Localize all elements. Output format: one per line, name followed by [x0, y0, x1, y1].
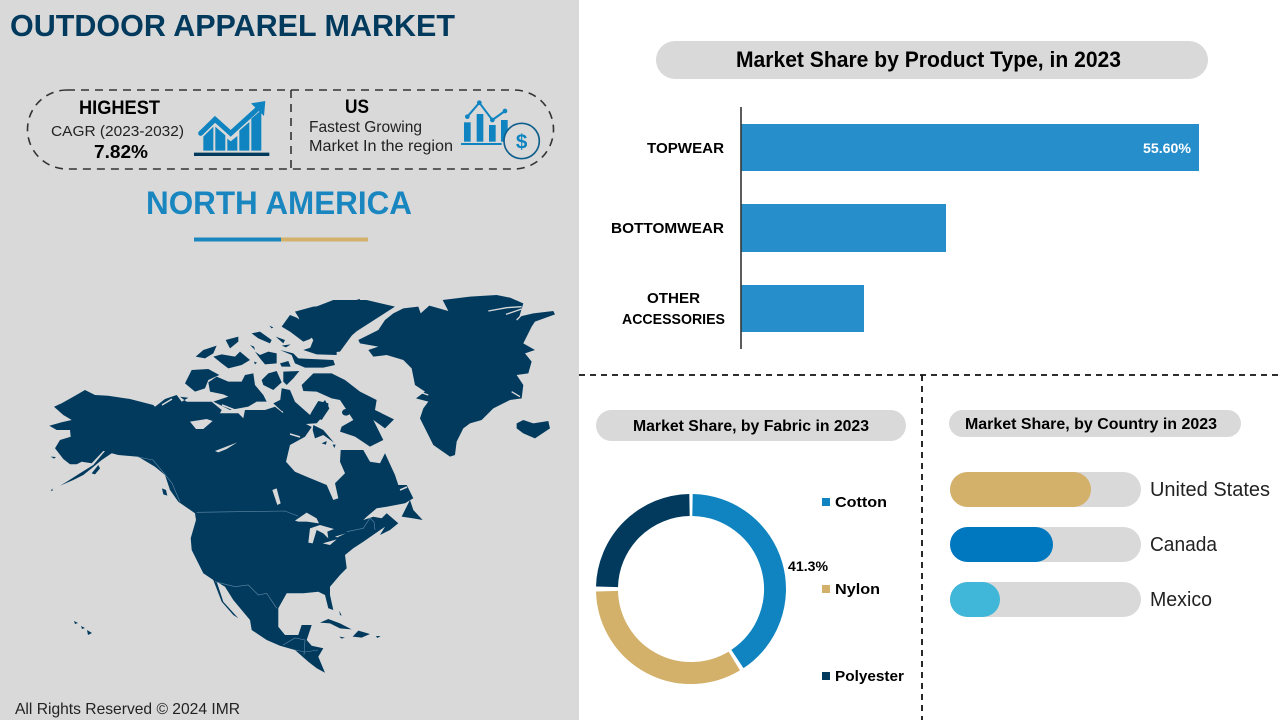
text: fastest growing US [309, 97, 453, 155]
bar labels [611, 140, 725, 328]
map: Great Lakes [272, 488, 346, 545]
map: North America [49, 295, 555, 673]
text: highest CAGR: HIGHEST [79, 98, 160, 119]
map: Foxe Basin island [342, 409, 350, 416]
map: Greenland [358, 295, 555, 457]
map: Arctic Archipelago [185, 299, 360, 411]
text: highest CAGR: 7.82% [94, 141, 148, 162]
map: coastal streaks [162, 399, 407, 511]
legend: Nylon [835, 581, 880, 598]
heading pill [656, 41, 1208, 79]
map: Melville Peninsula islet [313, 400, 329, 420]
progress bar: Canada: Canada [1150, 534, 1218, 556]
icon: growth chart [194, 101, 269, 154]
map: Hawaii [74, 621, 92, 635]
bar chart [611, 107, 1199, 349]
bar labels: OTHER [647, 290, 700, 307]
map: Greenland fjords [418, 307, 523, 397]
map: mainland [49, 388, 413, 673]
legend [822, 494, 904, 685]
icon: chart with dollar coin [461, 100, 539, 159]
text: fastest growing US: US [345, 97, 369, 118]
text: fastest growing US: Market In the region [309, 138, 453, 155]
panel: market share by product type [611, 41, 1208, 349]
map: country borders [138, 457, 375, 655]
bar labels: TOPWEAR [647, 140, 724, 157]
legend: Cotton [835, 494, 887, 511]
text: highest CAGR [51, 98, 184, 162]
heading pill [596, 410, 906, 441]
panel: left regional summary [0, 0, 579, 720]
progress bar: Mexico [950, 582, 1212, 617]
progress bar: Mexico: Mexico [1150, 589, 1212, 611]
map: Alaska islands [51, 457, 167, 496]
legend: Polyester [835, 668, 904, 685]
heading pill [949, 410, 1241, 437]
heading pill: Market Share, by Country in 2023 [965, 416, 1217, 433]
icon: chart with dollar coin: $ [516, 130, 528, 153]
progress bar: United States: United States [1150, 479, 1270, 501]
map: Ellesmere channels [298, 313, 337, 342]
map: Caribbean islands [320, 611, 381, 639]
panel: market share by fabric [596, 410, 906, 685]
map: Baffin Island [302, 373, 394, 447]
heading underline [194, 238, 368, 242]
map: northern lakes [190, 419, 237, 452]
panel: market share by country [949, 410, 1270, 617]
heading pill: Market Share by Product Type, in 2023 [736, 47, 1121, 72]
panel: key statistics [28, 90, 554, 169]
bar chart: 55.60% [1143, 141, 1191, 156]
progress bar: United States [950, 472, 1270, 507]
map: Ellesmere east [297, 300, 395, 353]
donut chart [607, 505, 775, 673]
heading: North America: NORTH AMERICA [146, 185, 412, 221]
heading pill: Market Share, by Fabric in 2023 [633, 418, 869, 435]
progress bar: Canada [950, 527, 1218, 562]
bar labels: BOTTOMWEAR [611, 220, 724, 237]
text: highest CAGR: CAGR (2023-2032) [51, 123, 184, 140]
title: OUTDOOR APPAREL MARKET [10, 9, 455, 43]
map: Hudson Bay islands [313, 425, 423, 520]
map: Iceland [517, 420, 550, 438]
data label: 41.3% [788, 559, 828, 574]
text: fastest growing US: Fastest Growing [309, 119, 422, 136]
footer: All Rights Reserved © 2024 IMR [15, 701, 240, 718]
bar labels: ACCESSORIES [622, 311, 725, 328]
